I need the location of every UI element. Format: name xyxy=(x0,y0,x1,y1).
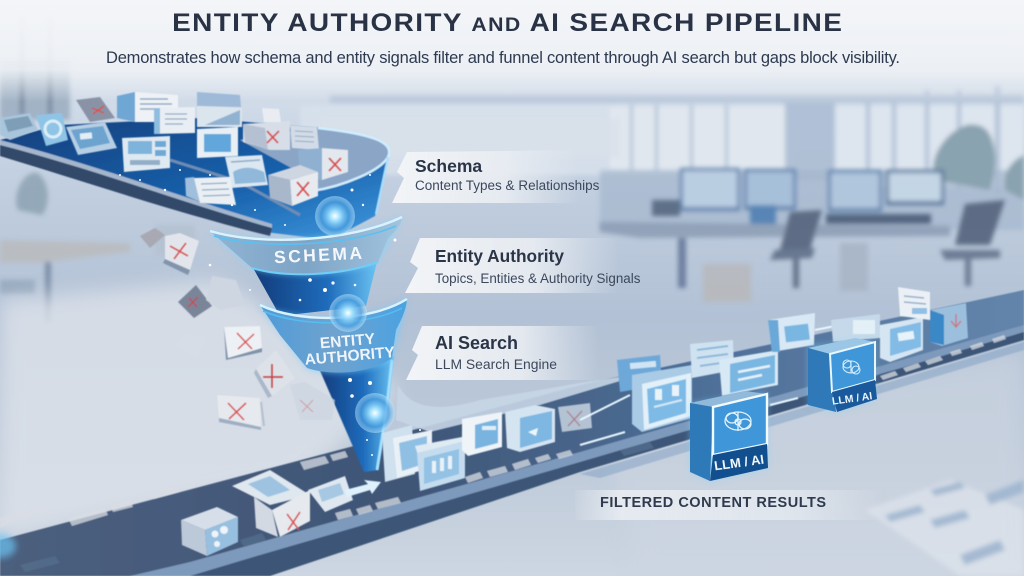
lower conveyor belt xyxy=(0,290,1024,576)
box: rejected top xyxy=(243,121,290,150)
callout: ai search xyxy=(406,326,600,380)
cube with icon xyxy=(181,507,238,556)
card: dark reject xyxy=(76,97,115,122)
box: tall stack xyxy=(197,92,242,127)
box: LLM AI back xyxy=(808,338,877,412)
card: chart sheet xyxy=(225,155,268,188)
orbs xyxy=(315,196,395,433)
card: back right faded xyxy=(831,314,880,342)
faint paper xyxy=(172,333,208,358)
label: LLM AI back: LLM / AI xyxy=(831,390,873,408)
rejected faint card xyxy=(558,403,592,432)
card: blue screen xyxy=(197,127,238,158)
box: rejected large xyxy=(268,165,318,206)
rejected: upright box xyxy=(224,326,262,360)
stacked cards xyxy=(382,425,432,482)
right belt cards xyxy=(580,287,968,445)
callout: entity authority: Topics, Entities & Authority Signals xyxy=(435,271,641,286)
callout: schema: Content Types & Relationships xyxy=(415,178,600,193)
rejected: faint box xyxy=(290,382,335,420)
ring label: entity authority: ENTITY xyxy=(319,331,376,352)
blue glow trails xyxy=(580,326,835,445)
box: rejected middle xyxy=(298,148,348,180)
callout: ai search: AI Search xyxy=(435,333,518,353)
funnel tail xyxy=(318,356,394,472)
rejected: dark tumbling xyxy=(178,276,245,318)
card: device xyxy=(0,113,38,140)
card: bar chart xyxy=(415,437,466,491)
card: middle front xyxy=(719,350,778,396)
rejected: floor box xyxy=(217,395,264,430)
rejected: tilted top xyxy=(140,228,199,275)
neck between schema and entity rings xyxy=(252,258,378,316)
paper sheets xyxy=(262,108,319,150)
box with document on top xyxy=(232,470,310,537)
card: screen xyxy=(505,405,555,452)
header band xyxy=(0,0,1024,102)
callout: schema xyxy=(392,150,600,203)
label: LLM AI front: LLM / AI xyxy=(713,452,765,473)
tilted document xyxy=(308,476,353,512)
doc: far right xyxy=(898,287,930,320)
funnel xyxy=(0,118,421,472)
card: document box xyxy=(117,92,178,122)
callout: filtered content results: FILTERED CONTENT RESULTS xyxy=(600,495,826,511)
direction arrow xyxy=(345,480,381,497)
ring: schema xyxy=(210,217,402,274)
swoosh from funnel to belt xyxy=(396,372,650,432)
title: ENTITY AUTHORITY AND AI SEARCH PIPELINE xyxy=(172,8,842,37)
upper funnel bowl xyxy=(0,118,389,240)
ring label: entity authority: AUTHORITY xyxy=(304,344,396,369)
subtitle: Demonstrates how schema and entity signals filter and funnel content through AI search but gaps block visibility. xyxy=(106,49,900,67)
content cards entering the funnel xyxy=(0,92,348,206)
callout: filtered content results xyxy=(575,490,885,520)
card: small left xyxy=(617,355,662,392)
callout: ai search: LLM Search Engine xyxy=(435,356,557,372)
card: document low xyxy=(185,177,236,205)
bottom belt items xyxy=(181,403,592,556)
callout: entity authority xyxy=(405,238,641,293)
falling rejected boxes xyxy=(140,228,335,430)
card: back right xyxy=(880,317,923,362)
box: LLM AI front xyxy=(690,391,768,481)
card: middle back xyxy=(690,340,734,378)
ring label: schema: SCHEMA xyxy=(274,243,363,267)
rejected: plus cube xyxy=(254,350,295,398)
card: layout xyxy=(462,412,502,456)
card: ring icon xyxy=(36,113,68,146)
ring: entity authority xyxy=(260,299,407,373)
card: back centre xyxy=(768,313,815,352)
card: big xyxy=(632,365,692,432)
card: interface tilted xyxy=(66,122,117,155)
card: document xyxy=(154,107,195,134)
card: interface front xyxy=(122,136,170,172)
box: download xyxy=(930,303,968,346)
sparkles xyxy=(119,169,421,456)
callout: schema: Schema xyxy=(415,156,482,176)
callout: entity authority: Entity Authority xyxy=(435,246,564,266)
